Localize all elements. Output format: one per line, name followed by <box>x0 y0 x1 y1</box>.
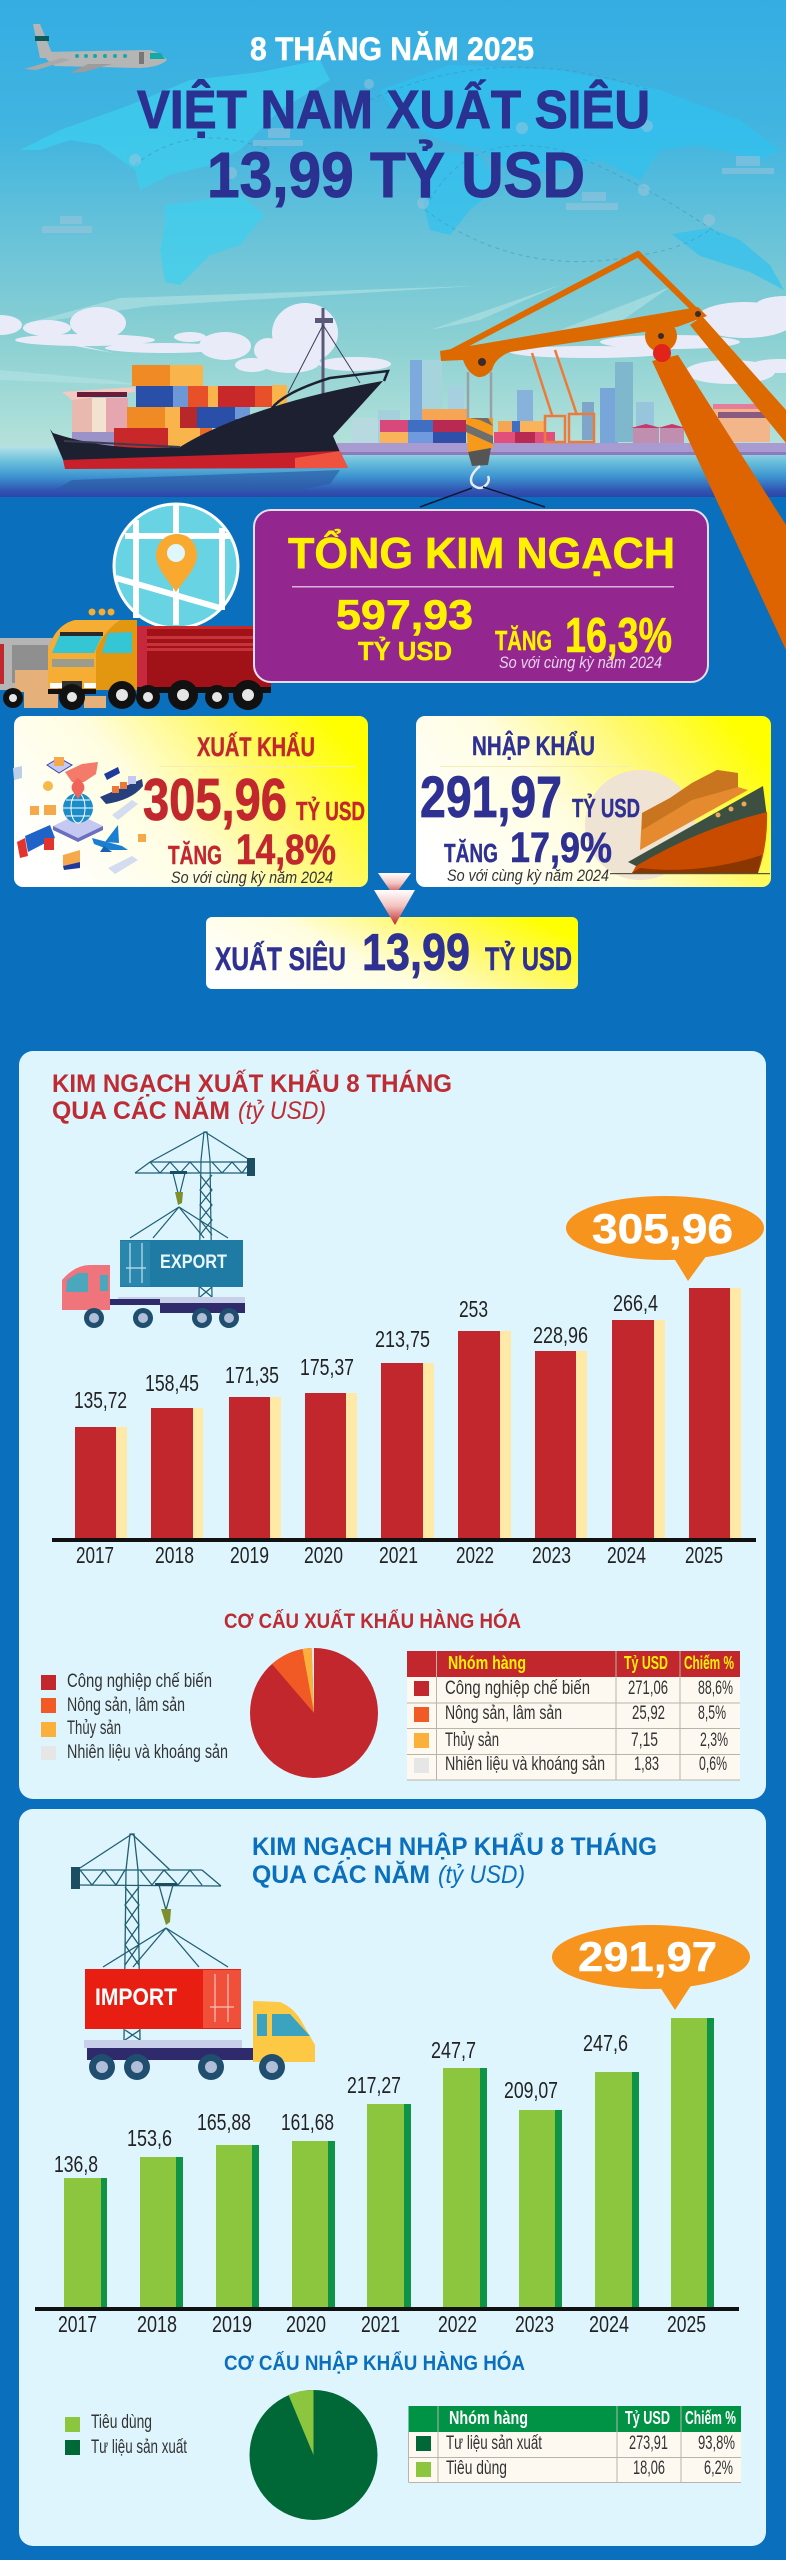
legend: import <box>65 2412 187 2458</box>
import comparison note: So với cùng kỳ năm 2024 <box>447 866 609 885</box>
table: export: 271,06 <box>628 1678 668 1699</box>
legend: export: Công nghiệp chế biến <box>67 1671 212 1692</box>
table: import: Chiếm % <box>685 2408 736 2428</box>
houses and building <box>631 404 770 443</box>
bars <box>75 1288 741 1538</box>
growth value: 16,3% <box>565 609 672 663</box>
table: export <box>407 1651 740 1780</box>
export value: 305,96 <box>143 767 287 833</box>
table: export: 8,5% <box>698 1703 726 1724</box>
value labels: 171,35 <box>225 1362 279 1388</box>
arrow: lower triangle <box>374 890 415 925</box>
table: import: 6,2% <box>704 2458 733 2479</box>
icon: cargo ship with globe <box>585 770 770 880</box>
panel: total trade <box>254 510 708 682</box>
table: import: 273,91 <box>629 2433 668 2454</box>
cargo ship <box>50 308 388 469</box>
table: export: Nhóm hàng <box>448 1653 526 1673</box>
import value: 291,97 <box>420 765 562 830</box>
surplus label: XUẤT SIÊU <box>215 941 346 977</box>
port containers <box>380 409 555 443</box>
icon: port crane with hook <box>420 254 786 650</box>
value labels: 158,45 <box>145 1370 199 1396</box>
value labels: 228,96 <box>533 1322 588 1348</box>
value labels: 165,88 <box>197 2109 251 2135</box>
year labels: 2021 <box>379 1542 418 1568</box>
table: export: Công nghiệp chế biến <box>445 1678 590 1699</box>
table: import: 93,8% <box>698 2433 735 2454</box>
legend: export: Thủy sản <box>67 1718 121 1739</box>
surplus value: 13,99 <box>362 924 470 982</box>
icon: map pin globe <box>114 504 238 628</box>
port quay <box>337 443 786 454</box>
heading: import chart: (tỷ USD) <box>438 1861 525 1889</box>
value labels: 153,6 <box>127 2125 172 2151</box>
total value: 597,93 <box>336 591 473 638</box>
heading: export chart <box>52 1069 452 1125</box>
year labels: 2023 <box>515 2311 554 2337</box>
table: export: 88,6% <box>698 1678 733 1699</box>
legend: export <box>41 1671 228 1763</box>
value labels: 253 <box>459 1296 488 1322</box>
year labels: 2020 <box>286 2311 326 2337</box>
import growth value: 17,9% <box>510 824 612 872</box>
panel: exports <box>13 716 368 887</box>
year labels: 2022 <box>456 1542 494 1568</box>
heading: export chart: (tỷ USD) <box>238 1097 326 1125</box>
table: export: Nông sản, lâm sản <box>445 1703 562 1724</box>
heading: import structure: CƠ CẤU NHẬP KHẨU HÀNG HÓA <box>224 2351 525 2375</box>
title line 1: VIỆT NAM XUẤT SIÊU <box>137 79 650 140</box>
title line 2: 13,99 TỶ USD <box>207 138 585 211</box>
world map <box>20 60 784 290</box>
export growth label: TĂNG <box>168 840 222 870</box>
legend: export: Nhiên liệu và khoáng sản <box>67 1742 228 1763</box>
value labels: 266,4 <box>613 1290 658 1316</box>
heading: export structure: CƠ CẤU XUẤT KHẨU HÀNG HÓA <box>224 1609 521 1633</box>
table: import: Nhóm hàng <box>449 2408 528 2428</box>
callout: 2025 export <box>566 1196 764 1281</box>
heading: import chart <box>252 1831 657 1889</box>
heading: import chart: KIM NGẠCH NHẬP KHẨU 8 THÁNG <box>252 1831 657 1861</box>
year labels: 2018 <box>137 2311 177 2337</box>
value labels: 247,7 <box>431 2037 476 2063</box>
surplus unit: TỶ USD <box>485 941 572 977</box>
table: export: 7,15 <box>631 1730 658 1751</box>
value labels <box>74 1290 658 1413</box>
export growth value: 14,8% <box>236 826 336 874</box>
year labels: 2017 <box>58 2311 97 2337</box>
year labels: 2018 <box>155 1542 194 1568</box>
container label: EXPORT <box>160 1252 227 1273</box>
year labels: 2022 <box>438 2311 477 2337</box>
year labels: 2017 <box>76 1542 114 1568</box>
year labels <box>58 2311 706 2337</box>
container label: IMPORT <box>95 1984 177 2011</box>
callout: 2025 import: 291,97 <box>578 1933 717 1980</box>
table: export: Nhiên liệu và khoáng sản <box>445 1754 605 1775</box>
callout: 2025 export: 305,96 <box>592 1205 733 1252</box>
sky streaks <box>0 285 670 385</box>
export unit: TỶ USD <box>296 796 365 826</box>
year labels: 2023 <box>532 1542 571 1568</box>
heading: export chart: QUA CÁC NĂM <box>52 1096 230 1125</box>
value labels: 161,68 <box>281 2109 334 2135</box>
arrow: upper triangle <box>378 873 411 896</box>
year labels: 2024 <box>607 1542 646 1568</box>
table: import: Tư liệu sản xuất <box>446 2433 542 2454</box>
import growth label: TĂNG <box>444 838 498 868</box>
value labels: 247,6 <box>583 2030 628 2056</box>
heading: export chart: KIM NGẠCH XUẤT KHẨU 8 THÁNG <box>52 1069 452 1098</box>
clouds <box>0 296 786 384</box>
year labels: 2024 <box>589 2311 629 2337</box>
pie chart: export <box>250 1648 378 1778</box>
table: export: 1,83 <box>634 1754 659 1775</box>
value labels <box>54 2030 628 2177</box>
title <box>137 31 650 211</box>
table: import: Tỷ USD <box>625 2408 670 2428</box>
heading: total trade: TỔNG KIM NGẠCH <box>288 527 675 578</box>
pie chart: import <box>250 2390 378 2520</box>
title kicker: 8 THÁNG NĂM 2025 <box>250 31 534 67</box>
bar chart: export by year <box>52 1288 756 1568</box>
import unit: TỶ USD <box>572 793 640 823</box>
year labels: 2020 <box>304 1542 343 1568</box>
year labels: 2019 <box>212 2311 252 2337</box>
year labels <box>76 1542 723 1568</box>
table: export: 2,3% <box>700 1730 728 1751</box>
heading: imports: NHẬP KHẨU <box>472 730 595 761</box>
year labels: 2025 <box>685 1542 723 1568</box>
bar chart: import by year <box>35 2018 739 2337</box>
legend: import: Tư liệu sản xuất <box>91 2437 187 2458</box>
year labels: 2021 <box>361 2311 400 2337</box>
growth label: TĂNG <box>495 625 552 656</box>
heading: exports: XUẤT KHẨU <box>197 731 315 762</box>
panel: import chart <box>19 1809 766 2546</box>
year labels: 2019 <box>230 1542 269 1568</box>
table: import: 18,06 <box>633 2458 665 2479</box>
table: export: 0,6% <box>699 1754 727 1775</box>
table: export: 25,92 <box>632 1703 665 1724</box>
value labels: 175,37 <box>300 1354 354 1380</box>
legend: export: Nông sản, lâm sản <box>67 1695 185 1716</box>
airplane icon <box>24 24 167 73</box>
panel: export chart <box>19 1051 766 1799</box>
value labels: 135,72 <box>74 1387 127 1413</box>
value labels: 217,27 <box>347 2072 401 2098</box>
value labels: 136,8 <box>54 2151 98 2177</box>
legend: import: Tiêu dùng <box>91 2412 152 2433</box>
export comparison note: So với cùng kỳ năm 2024 <box>171 868 333 887</box>
value labels: 213,75 <box>375 1326 430 1352</box>
value labels: 209,07 <box>504 2077 558 2103</box>
ship reflection <box>55 470 340 490</box>
harbour cranes <box>532 350 594 442</box>
icon: truck <box>0 608 271 710</box>
heading: import chart: QUA CÁC NĂM <box>252 1860 430 1889</box>
panel: imports <box>416 716 771 887</box>
year labels: 2025 <box>667 2311 706 2337</box>
bars <box>64 2018 714 2307</box>
total unit: TỶ USD <box>358 636 452 666</box>
icon: export crane and truck <box>62 1132 255 1328</box>
table: export: Thủy sản <box>445 1730 499 1751</box>
icon: global logistics <box>13 757 146 874</box>
panel: trade surplus <box>206 917 578 989</box>
comparison note: So với cùng kỳ năm 2024 <box>499 653 662 672</box>
callout: 2025 import <box>552 1925 750 2010</box>
table: import: Tiêu dùng <box>446 2458 507 2479</box>
table: export: Chiếm % <box>684 1653 734 1673</box>
city skyline <box>352 360 654 446</box>
table: import <box>408 2406 741 2482</box>
table: export: Tỷ USD <box>624 1653 668 1673</box>
icon: import crane and truck <box>71 1834 315 2080</box>
